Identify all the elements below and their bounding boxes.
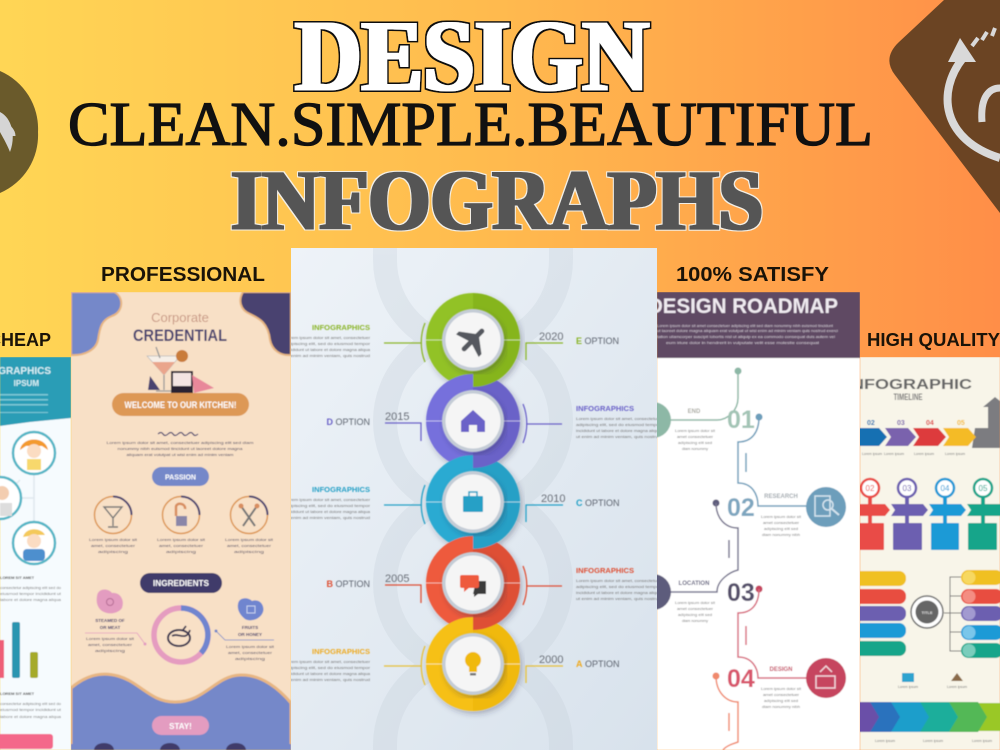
step 2: research: adipiscing elit sed: [764, 526, 798, 531]
header band: [648, 292, 860, 358]
arrow row: Lorem ipsum: [862, 451, 883, 456]
text block: consectetur adipiscing elit sed do: [0, 585, 62, 590]
label: 100% SATISFY: 100% SATISFY: [676, 264, 830, 286]
caption left: amet, consectetuer: [88, 642, 133, 647]
captions row: adipiscing: [166, 549, 196, 554]
arrow row: [858, 397, 1000, 456]
blob: top left: [71, 292, 121, 355]
step cards row: [855, 479, 1000, 550]
row B left: 2005 option: [326, 573, 421, 603]
row C left: infographics: adipiscing elit, sed do eiusmod tempor: [285, 503, 371, 508]
heading: infographic timeline: [846, 376, 972, 402]
row B left: 2005 option: B OPTION: [326, 579, 370, 589]
button: [0, 734, 53, 749]
intro text: [106, 440, 254, 457]
row E right: 2020 option: [526, 331, 619, 360]
captions row: Lorem ipsum dolor sit: [157, 537, 206, 542]
icon: left round badge: [0, 71, 38, 193]
step 4: design: diam nonummy nibh: [762, 704, 800, 709]
step cards row: 02: [866, 484, 875, 493]
step 1: end: [635, 368, 755, 451]
heading: Corporate: Corporate: [151, 310, 209, 325]
pill: stay: [152, 716, 209, 735]
pill: passion: [152, 467, 209, 486]
step cards row: 04: [941, 484, 950, 493]
step 2: research: diam nonummy nibh: [762, 532, 800, 537]
text block: LOREM SIT AMET: [0, 575, 35, 580]
intro text: Lorem ipsum dolor sit amet, consectetuer adipiscing elit sed diam: [106, 440, 254, 445]
step 3: location: diam nonummy: [682, 618, 708, 623]
text block: [0, 575, 62, 602]
row E left: infographics: incididunt ut labore et dolore magna aliqua: [285, 347, 371, 352]
arrow row: Lorem ipsum: [945, 451, 966, 456]
header band: eum iriure dolor in hendrerit in vulputate velit esse molestie consequat: [666, 340, 820, 345]
header band: Lorem ipsum dolor sit amet consectetuer adipiscing elit sed diam nonummy nibh euismod tincidunt: [657, 323, 834, 328]
header band: [0, 357, 71, 426]
row D left: 2015 option: [326, 411, 421, 441]
row A left: infographics: INFOGRAPHICS: [312, 647, 370, 656]
bar chart: [0, 622, 38, 678]
panel: circular timeline: [285, 248, 662, 750]
step 1: end: adipiscing elit sed: [678, 440, 712, 445]
step 3: location: LOCATION: [679, 581, 709, 587]
pill: welcome: WELCOME TO OUR KITCHEN!: [124, 400, 236, 411]
arrow row: 04: [926, 420, 934, 427]
step 4: design: amet consectetuer: [763, 692, 800, 697]
row C right: 2010 option: [526, 493, 620, 522]
captions row: [89, 537, 274, 554]
step 1: end: diam nonummy: [682, 446, 708, 451]
row A left: infographics: ut enim ad minim veniam, quis nostrud: [285, 677, 370, 682]
timeline rings: [426, 293, 520, 711]
step 4: design: Lorem ipsum dolor sit: [761, 686, 802, 691]
connector lines: [16, 475, 35, 521]
row A left: infographics: adipiscing elit, sed do eiusmod tempor: [285, 665, 371, 670]
text block: labore et dolore magna aliqua: [0, 597, 62, 602]
captions row: adipiscing: [98, 549, 128, 554]
small icons row: Lorem ipsum: [898, 684, 919, 689]
button: chat: [442, 552, 504, 614]
button: bulb: [442, 633, 504, 695]
icon: glass circle: [94, 496, 132, 534]
chart: donut with bowl: [154, 608, 208, 662]
row C left: infographics: ut enim ad minim veniam, quis nostrud: [285, 515, 370, 520]
button: plane: [442, 309, 504, 371]
row A left: infographics: [285, 646, 425, 685]
row D left: 2015 option: D OPTION: [326, 417, 370, 427]
caption left: adipiscing: [95, 648, 125, 653]
center hub: [911, 596, 943, 628]
row C left: infographics: [285, 485, 425, 524]
captions row: adipiscing: [234, 549, 264, 554]
row C left: infographics: incididunt ut labore et dolore magna aliqua: [285, 509, 371, 514]
text block lower: [0, 691, 62, 719]
caption right: Lorem ipsum dolor sit: [226, 644, 275, 649]
decoration wave: [158, 432, 198, 436]
step 5: connector: [712, 672, 738, 750]
step 1: end: amet consectetuer: [677, 434, 714, 439]
captions row: amet, consectetuer: [91, 543, 136, 548]
blob: top right: [240, 292, 291, 355]
step 4: design: [727, 586, 846, 709]
heading: infographic timeline: INFOGRAPHIC: [846, 376, 972, 393]
panel: corporate credential: [71, 292, 291, 750]
step 2: research: 02: [727, 494, 755, 522]
row C left: infographics: Lorem ipsum dolor sit amet, consectetuer: [285, 497, 371, 502]
bottom arrow band: Lorem ipsum: [875, 738, 896, 743]
avatar: blond: [13, 522, 55, 564]
row B right: infographics: Lorem ipsum dolor sit amet, consectetuer: [576, 578, 662, 583]
panel: cheap infographic: [0, 357, 71, 750]
row C right: 2010 option: C OPTION: [576, 498, 620, 508]
caption left: OR MEAT: [100, 625, 120, 630]
step 4: design: 04: [727, 665, 755, 693]
step 1: end: END: [688, 409, 701, 415]
step 4: design: adipiscing elit sed: [764, 698, 798, 703]
icon: mixer circle: [162, 496, 200, 534]
bottom arrow band: [858, 702, 1000, 743]
step 1: end: Lorem ipsum dolor sit: [675, 428, 716, 433]
row E left: infographics: [285, 323, 425, 362]
row B right: infographics: adipiscing elit, sed do eiusmod tempor: [576, 584, 662, 589]
row A left: infographics: Lorem ipsum dolor sit amet, consectetuer: [285, 659, 371, 664]
captions row: amet, consectetuer: [159, 543, 204, 548]
captions row: Lorem ipsum dolor sit: [225, 537, 274, 542]
caption right: [214, 625, 275, 661]
bottom arrow band: Lorem ipsum: [972, 738, 993, 743]
step cards row: 05: [979, 484, 988, 493]
blob: pink bulb: [97, 590, 123, 613]
step 3: location: adipiscing elit sed: [678, 612, 712, 617]
row A right: 2000 option: A OPTION: [576, 659, 620, 669]
row D left: 2015 option: 2015: [385, 411, 409, 423]
pill: welcome: [112, 393, 249, 416]
row D right: infographics: INFOGRAPHICS: [576, 404, 634, 413]
row D right: infographics: ut enim ad minim veniam, quis nostrud: [576, 434, 661, 439]
captions row: Lorem ipsum dolor sit: [89, 537, 138, 542]
small icons row: [898, 673, 968, 689]
captions row: amet, consectetuer: [227, 543, 272, 548]
caption right: amet, consectetuer: [228, 650, 273, 655]
header band: IPSUM: [14, 379, 39, 388]
small icons row: Lorem ipsum: [947, 684, 968, 689]
bottom arrow band: Lorem ipsum: [923, 738, 944, 743]
step 4: design: DESIGN: [769, 667, 793, 673]
bottom wave: [71, 674, 291, 748]
pill: ingredients: INGREDIENTS: [153, 579, 210, 588]
panel: design roadmap: [635, 292, 860, 750]
step 2: research: amet consectetuer: [763, 520, 800, 525]
label: PROFESSIONAL: PROFESSIONAL: [101, 264, 265, 286]
panel: high quality timeline: [845, 357, 1000, 750]
row E left: infographics: Lorem ipsum dolor sit amet, consectetuer: [285, 335, 371, 340]
row A left: infographics: incididunt ut labore et dolore magna aliqua: [285, 671, 371, 676]
row B right: infographics: ut enim ad minim veniam, quis nostrud: [576, 596, 661, 601]
step 1: end: 01: [727, 406, 755, 434]
connectors: [944, 577, 961, 651]
arrow row: Lorem ipsum: [884, 451, 905, 456]
row D right: infographics: incididunt ut labore et dolore magna aliqua: [576, 428, 662, 433]
icon: right diamond badge with arrow: [889, 0, 1000, 213]
header band: ut laoreet dolore magna aliquam erat volutpat ut wisi enim ad minim veniam quis nostrud exerci: [657, 328, 838, 333]
caption left: Lorem ipsum dolor sit: [86, 636, 135, 641]
text block lower: eiusmod tempor incididunt ut: [0, 707, 62, 712]
avatar: orange hair: [13, 432, 55, 474]
button: house: [442, 390, 504, 452]
intro text: nonummy nibh euismod tincidunt ut laoreet dolore magna: [118, 446, 243, 451]
step 2: research: RESEARCH: [764, 494, 798, 500]
row B right: infographics: INFOGRAPHICS: [576, 566, 634, 575]
header band: DESIGN ROADMAP: [648, 295, 838, 318]
title: DESIGN: DESIGN: [295, 0, 649, 113]
row E right: 2020 option: E OPTION: [576, 336, 619, 346]
heading: infographic timeline: TIMELINE: [894, 392, 922, 402]
row C right: 2010 option: 2010: [541, 493, 565, 505]
row B right: infographics: incididunt ut labore et dolore magna aliqua: [576, 590, 662, 595]
bottom portraits: [94, 743, 246, 750]
center hub: TITLE: [921, 610, 933, 615]
row C left: infographics: INFOGRAPHICS: [312, 485, 370, 494]
row E left: infographics: adipiscing elit, sed do eiusmod tempor: [285, 341, 371, 346]
row D right: infographics: Lorem ipsum dolor sit amet, consectetuer: [576, 416, 662, 421]
caption right: FRUITS: [242, 625, 258, 630]
row E left: infographics: INFOGRAPHICS: [312, 323, 370, 332]
button: briefcase: [442, 471, 504, 533]
pill: stay: STAY!: [169, 722, 192, 731]
row E right: 2020 option: 2020: [539, 331, 563, 343]
right pills: [961, 570, 1000, 658]
caption right: adipiscing: [235, 656, 265, 661]
subtitle: CLEAN.SIMPLE.BEAUTIFUL: CLEAN.SIMPLE.BEAUTIFUL: [68, 91, 873, 159]
row E left: infographics: ut enim ad minim veniam, quis nostrud: [285, 353, 370, 358]
step 3: location: [635, 500, 755, 623]
caption left: STEAMED OF: [95, 618, 125, 623]
caption left: [85, 618, 146, 653]
heading: CREDENTIAL: CREDENTIAL: [133, 326, 227, 345]
row D right: infographics: [523, 404, 662, 443]
decorative arcs: [385, 248, 561, 750]
arrow row: Lorem ipsum: [914, 451, 935, 456]
step cards row: 03: [903, 484, 912, 493]
step 3: location: 03: [727, 579, 755, 607]
arrow row: 05: [957, 420, 965, 427]
text block lower: consectetur adipiscing elit sed do: [0, 701, 62, 706]
icon: cutlery circle: [230, 496, 268, 534]
row B left: 2005 option: 2005: [385, 573, 409, 585]
caption right: OR HONEY: [238, 632, 262, 637]
arrow row: 03: [897, 420, 905, 427]
title: INFOGRAPHS: INFOGRAPHS: [231, 152, 763, 248]
pill: passion: PASSION: [165, 474, 196, 482]
step 2: research: [727, 414, 846, 537]
text block: eiusmod tempor incididunt ut: [0, 591, 62, 596]
text block lower: labore et dolore magna aliqua: [0, 714, 62, 719]
text block lower: LOREM SIT AMET: [0, 691, 35, 696]
row A right: 2000 option: 2000: [539, 654, 563, 666]
header band: tation ullamcorper suscipit lobortis nisl ut aliquip ex ea commodo consequat duis autem vel: [657, 334, 835, 339]
pill: ingredients: [140, 573, 222, 593]
row B right: infographics: [523, 566, 662, 605]
row D right: infographics: adipiscing elit, sed do eiusmod tempor: [576, 422, 662, 427]
illustration: cocktail and food: [147, 347, 214, 393]
step 3: location: amet consectetuer: [677, 606, 714, 611]
arrow row: 02: [867, 420, 875, 427]
step 2: research: Lorem ipsum dolor sit: [761, 514, 802, 519]
intro text: aliquam erat volutpat ut wisi enim ad minim veniam: [126, 452, 234, 457]
row A right: 2000 option: [526, 654, 620, 683]
left pills: [845, 571, 906, 656]
blob: blue: [238, 598, 263, 620]
step 3: location: Lorem ipsum dolor sit: [675, 600, 716, 605]
avatar: man: [0, 477, 21, 519]
label: HIGH QUALITY: HIGH QUALITY: [867, 330, 1000, 350]
